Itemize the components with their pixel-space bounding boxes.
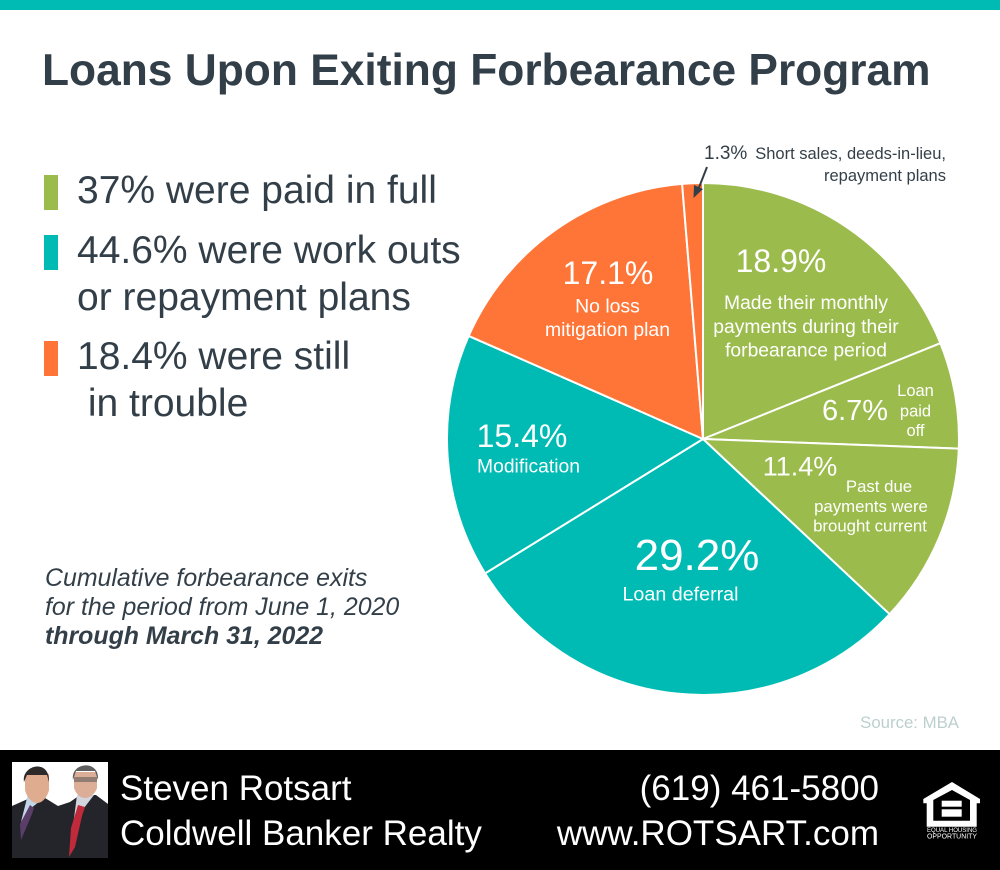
slice: loan paid off [703, 343, 959, 449]
slice: past due brought current: payments were [814, 497, 928, 516]
callout: short sales label: Short sales, deeds-in-lieu, [755, 145, 946, 163]
callout: short sales label [755, 145, 946, 185]
slice: past due brought current: Past due [846, 477, 912, 496]
slice: made monthly payments: forbearance period [725, 340, 887, 362]
period note: for the period from June 1, 2020 [45, 593, 399, 621]
slice: modification: Modification [477, 456, 580, 478]
legend text: paid in full: 37% were paid in full [77, 169, 437, 212]
callout: short sales value: 1.3% [704, 143, 747, 164]
company name: Coldwell Banker Realty [120, 814, 482, 853]
slice: loan paid off: off [906, 422, 925, 440]
period note: Cumulative forbearance exits [45, 564, 367, 592]
slice: no loss mitigation plan [469, 184, 703, 439]
period note: through March 31, 2022 [45, 622, 323, 650]
slice: past due brought current: 11.4% [763, 452, 837, 482]
legend swatch: orange [44, 341, 58, 376]
legend text: still in trouble: in trouble [88, 382, 248, 425]
slice: loan paid off: paid [900, 402, 931, 420]
legend text: still in trouble [77, 335, 350, 425]
slice: loan paid off: 6.7% [822, 395, 888, 427]
footer bar [0, 750, 1000, 870]
slice: past due brought current: brought current [813, 516, 927, 536]
slice: no loss mitigation plan: No loss [575, 296, 640, 318]
legend swatch: green [44, 175, 58, 210]
arrow: short sales callout [694, 167, 707, 198]
slice: past due brought current [703, 439, 959, 614]
agent name: Steven Rotsart [120, 769, 352, 808]
slice: loan paid off: Loan [897, 382, 934, 400]
slice: loan deferral: 29.2% [635, 531, 759, 580]
icon: equal housing opportunity: EQUAL HOUSING [927, 827, 977, 834]
website: www.ROTSART.com [557, 814, 879, 853]
slice: short sales [682, 183, 703, 439]
top accent bar [0, 0, 1000, 10]
slice: made monthly payments [703, 183, 940, 439]
legend text: work outs: or repayment plans [77, 276, 411, 319]
slice: loan deferral: Loan deferral [622, 584, 739, 606]
slice: made monthly payments: 18.9% [736, 243, 826, 279]
slice: modification: 15.4% [477, 418, 567, 454]
legend text: work outs: 44.6% were work outs [77, 229, 461, 272]
icon: equal housing opportunity [923, 782, 980, 840]
slice: no loss mitigation plan: 17.1% [563, 255, 653, 291]
legend: paid in full [44, 169, 437, 212]
agent photo [12, 762, 108, 858]
period note [45, 564, 399, 650]
slice: loan deferral [485, 439, 890, 695]
legend: still in trouble [44, 335, 350, 425]
legend: work outs [44, 229, 461, 319]
phone number: (619) 461-5800 [640, 769, 879, 808]
legend text: work outs [77, 229, 461, 319]
legend text: still in trouble: 18.4% were still [77, 335, 350, 378]
callout: short sales label: repayment plans [824, 167, 946, 185]
legend swatch: teal [44, 235, 58, 270]
slice: no loss mitigation plan: mitigation plan [545, 319, 670, 341]
slice: made monthly payments: Made their monthly [724, 293, 888, 314]
slice: made monthly payments: payments during their [713, 317, 899, 338]
icon: equal housing opportunity: OPPORTUNITY [927, 834, 977, 840]
slice: modification [447, 336, 703, 573]
source: Source: MBA [860, 713, 959, 732]
title: Loans Upon Exiting Forbearance Program [42, 46, 931, 95]
